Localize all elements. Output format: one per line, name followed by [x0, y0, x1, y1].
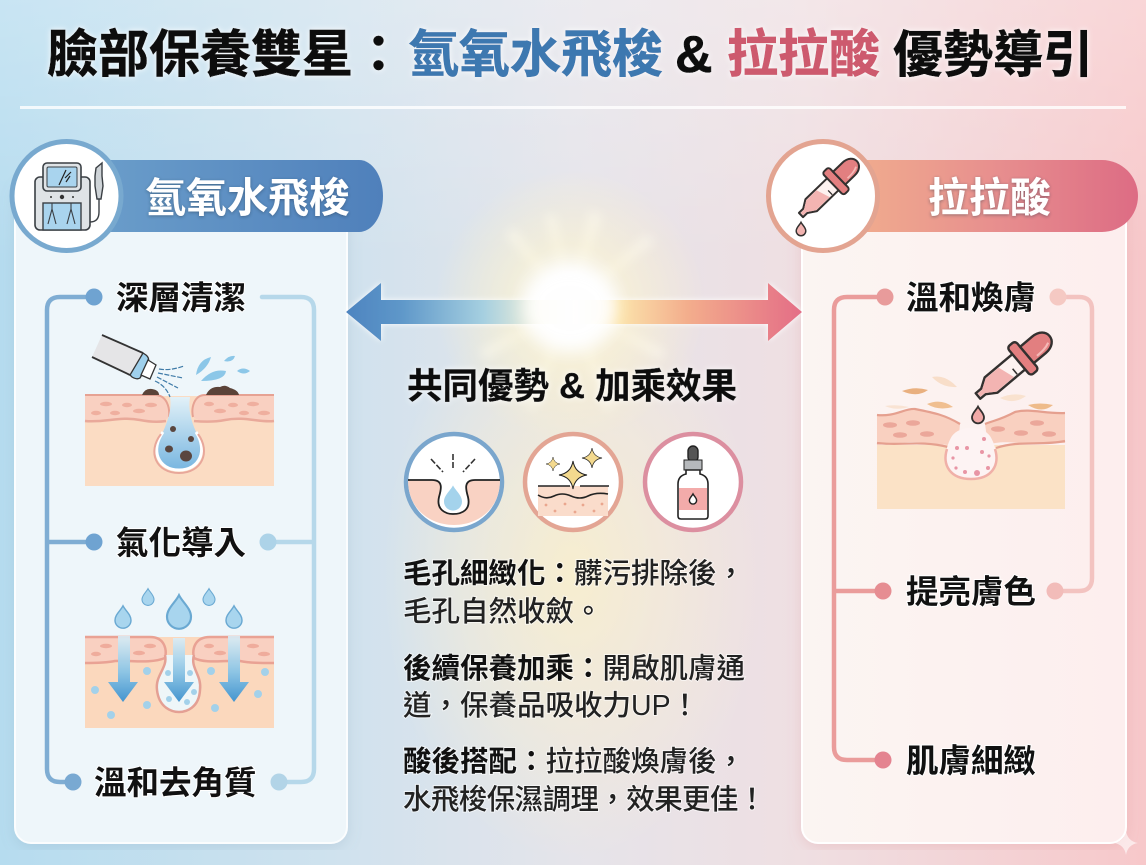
icon: clean pore [406, 434, 502, 530]
label: 溫和去角質: 溫和去角質 [94, 765, 257, 801]
panel card right [802, 180, 1126, 843]
title: 優勢導引 [893, 27, 1093, 83]
sun core over arrow [524, 268, 616, 348]
header label left: 氫氧水飛梭 [145, 175, 350, 221]
center heading: 加乘效果 [595, 366, 737, 406]
panel card left [15, 180, 347, 843]
illustration: gentle renewal [877, 322, 1065, 509]
benefit: 後續保養加乘: 後續保養加乘：開啟肌膚通 [403, 653, 745, 685]
icon: serum bottle [645, 434, 741, 530]
benefit: 毛孔細緻化: 毛孔細緻化：髒污排除後， [403, 558, 745, 590]
header label right: 拉拉酸 [928, 175, 1051, 221]
watermark sparkle [1114, 831, 1138, 855]
label: 溫和煥膚: 溫和煥膚 [906, 280, 1036, 316]
header pill right [860, 160, 1138, 232]
benefit: 酸後搭配: 酸後搭配：拉拉酸煥膚後， [403, 746, 745, 778]
text block: benefits [403, 558, 766, 816]
title: 氫氧水飛梭 [408, 26, 663, 83]
label: 氣化導入: 氣化導入 [116, 525, 246, 561]
center heading: & [559, 365, 585, 406]
panel: 氫氧水飛梭 [12, 142, 383, 843]
icon: dropper [768, 142, 878, 250]
illustration: deep cleansing [85, 335, 274, 486]
connector lines right [834, 288, 1092, 768]
title: & [675, 26, 713, 84]
connector lines left [47, 288, 314, 790]
title: 拉拉酸 [727, 26, 880, 83]
label: 提亮膚色: 提亮膚色 [906, 574, 1036, 610]
icon: sparkling skin [525, 434, 621, 530]
sun glow and rays [435, 170, 705, 440]
label: 肌膚細緻: 肌膚細緻 [906, 743, 1036, 779]
benefit: 毛孔細緻化: 毛孔自然收斂。 [403, 596, 603, 628]
header pill left [100, 160, 383, 232]
center heading: 共同優勢 [407, 366, 549, 406]
double arrow [346, 283, 802, 341]
panel: 拉拉酸 [768, 142, 1138, 843]
label: 深層清潔: 深層清潔 [116, 280, 246, 316]
benefit: 酸後搭配: 水飛梭保濕調理，效果更佳！ [403, 784, 766, 816]
title: 臉部保養雙星： [47, 26, 404, 83]
benefit: 後續保養加乘: 道，保養品吸收力UP！ [403, 690, 699, 722]
icon: hydrafacial machine [12, 142, 121, 250]
illustration: gas infusion [85, 589, 274, 728]
